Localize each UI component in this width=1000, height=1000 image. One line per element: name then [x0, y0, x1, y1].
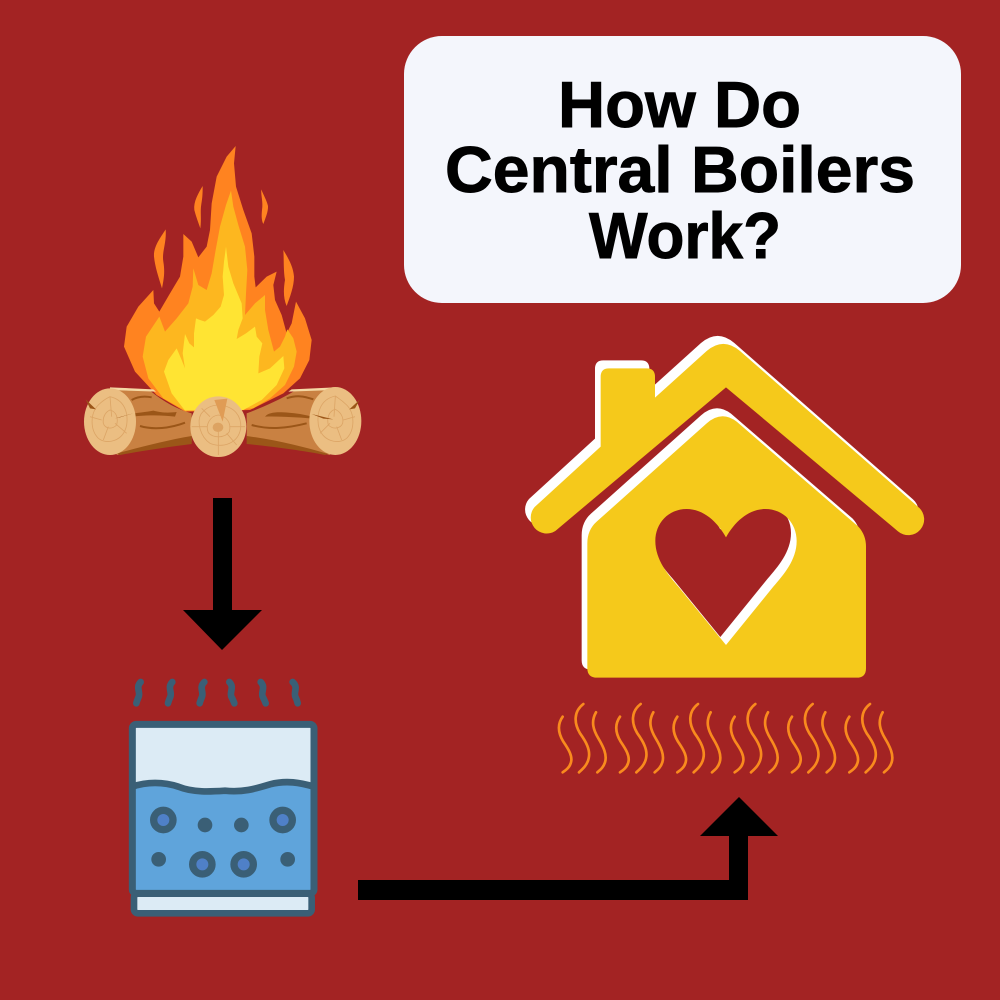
bubbles — [154, 810, 292, 874]
arrow: fire to water — [183, 498, 262, 650]
title: Central Boilers — [445, 133, 915, 206]
icon: campfire — [84, 146, 361, 457]
tank air space — [132, 725, 314, 791]
flames — [124, 146, 312, 412]
steam — [136, 682, 298, 703]
tank base — [134, 894, 312, 913]
title panel — [404, 36, 961, 303]
house body with heart cut-out — [587, 416, 866, 678]
icon: boiling water tank — [132, 682, 314, 913]
small bubbles — [151, 818, 295, 867]
house roof — [531, 344, 924, 535]
title — [445, 68, 915, 272]
log: centre — [190, 396, 246, 457]
arrow: water to house — [358, 797, 778, 900]
water line — [132, 782, 314, 791]
water — [132, 782, 314, 893]
log: right — [247, 387, 361, 455]
heat waves — [559, 704, 892, 772]
title: How Do — [558, 68, 801, 141]
log: left — [84, 387, 192, 455]
tank outline — [132, 724, 314, 893]
title: Work? — [589, 199, 781, 272]
house white offset — [525, 336, 918, 670]
icon: house with heart — [525, 336, 924, 772]
